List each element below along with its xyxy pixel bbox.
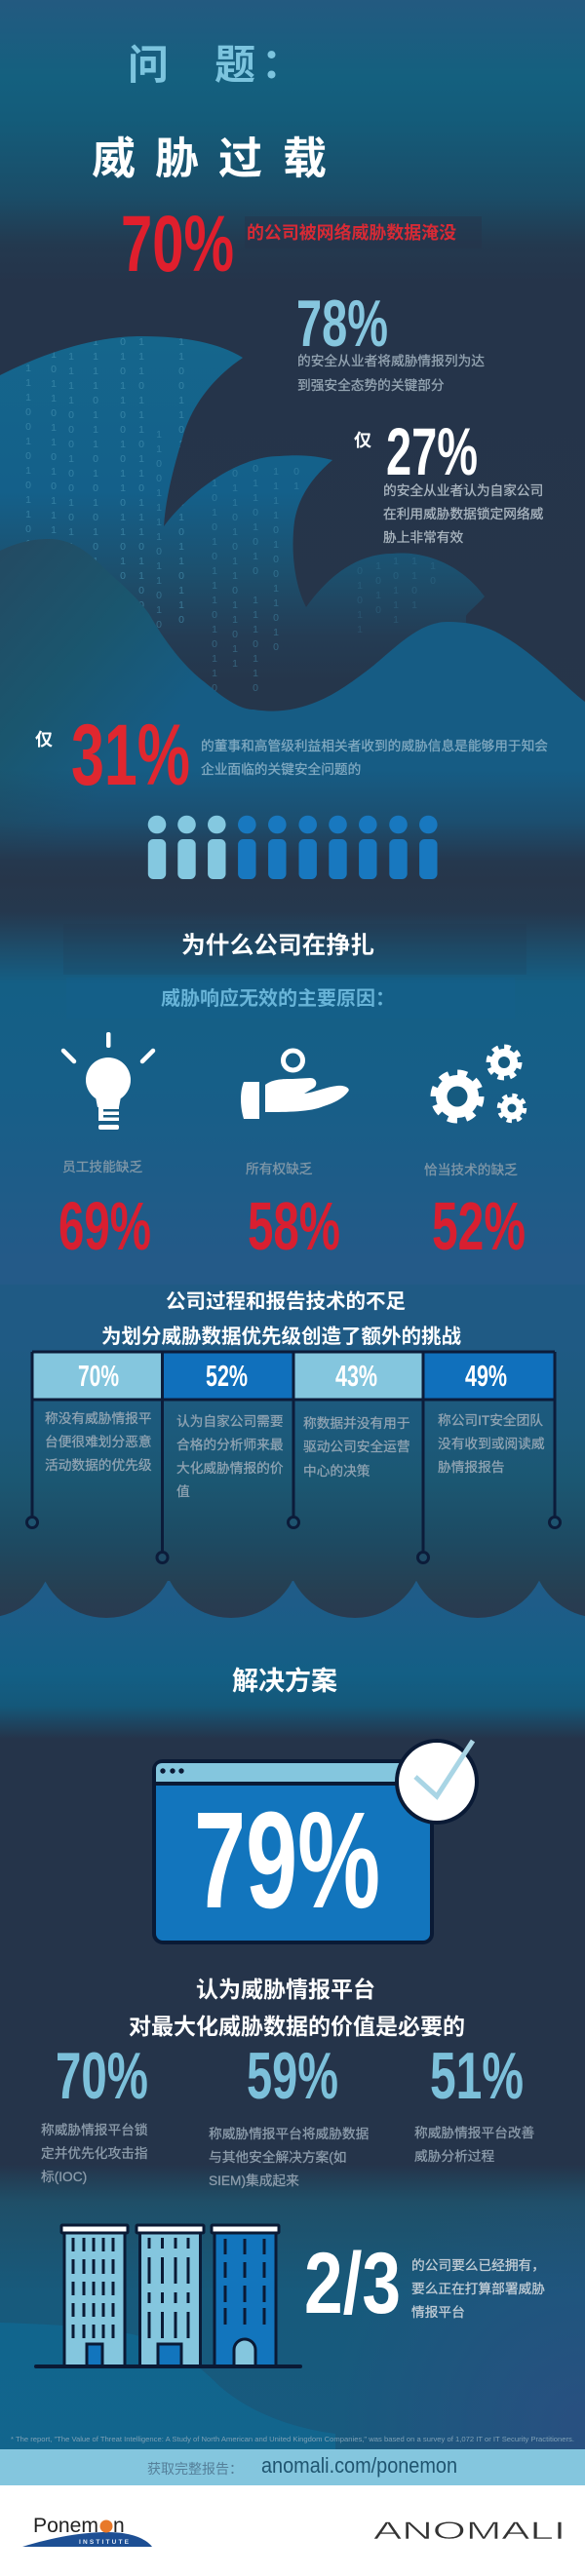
stat: 78%	[296, 287, 485, 393]
heading: process and reporting gaps: 公司过程和报告技术的不足	[166, 1290, 406, 1313]
binary data columns: 101101101011110101	[48, 349, 59, 612]
number: 27%	[386, 414, 478, 489]
description: 的安全从业者认为自家公司	[383, 482, 543, 498]
footer	[0, 2485, 585, 2576]
platform stat 2 text: 与其他安全解决方案(如	[209, 2149, 346, 2165]
platform stat 3 text	[414, 2126, 534, 2164]
scalloped section background	[0, 1285, 585, 1618]
platform stats numbers: 70%	[56, 2039, 148, 2113]
platform stat 3 text: 称威胁情报平台改善	[414, 2126, 534, 2140]
binary data columns: 101010111010110	[209, 478, 220, 697]
column 3 text	[303, 1416, 410, 1479]
subheading: main reasons	[66, 978, 515, 1019]
column 2 text: 值	[176, 1484, 190, 1499]
url: anomali.com/ponemon	[261, 2453, 457, 2478]
icon: gears	[433, 1047, 525, 1121]
description: 的公司被网络威胁数据淹没	[247, 219, 456, 245]
reason percentages: 58%	[248, 1188, 340, 1264]
number: 2/3	[304, 2234, 401, 2331]
description: 胁上非常有效	[383, 530, 463, 545]
column 2 text: 认为自家公司需要	[176, 1413, 284, 1429]
description: 在利用威胁数据锁定网络威	[383, 507, 544, 521]
logo: Ponemon Institute: n	[113, 2515, 125, 2537]
title: 问题: 题	[214, 42, 255, 88]
binary data columns: 1100111101101011	[153, 429, 165, 663]
column 1 text: 台便很难划分恶意	[45, 1434, 152, 1449]
column 2 text: 合格的分析师来最	[176, 1438, 284, 1452]
description: 到强安全态势的关键部分	[297, 377, 445, 393]
heading: 威胁过载	[92, 134, 327, 183]
reason labels	[62, 1160, 518, 1177]
number: 79%	[194, 1783, 380, 1937]
column 1 text: 称没有威胁情报平	[45, 1411, 152, 1426]
title: 问题	[128, 41, 302, 88]
heading: process and reporting gaps	[101, 1290, 461, 1348]
binary data columns: 01011	[354, 565, 366, 638]
binary data columns: 11001101001010110110	[176, 336, 187, 629]
number: 31%	[71, 706, 190, 803]
icon: hand with ownership token	[241, 1051, 349, 1119]
reason percentages: 52%	[432, 1188, 526, 1264]
column 2 text: 大化威胁情报的价	[176, 1461, 284, 1476]
column 4 text	[438, 1412, 545, 1475]
back wave	[0, 336, 485, 741]
title bar	[156, 1763, 430, 1783]
header percentages: 49%	[465, 1359, 507, 1393]
title: 问题: 问	[128, 42, 169, 88]
platform stat 1 text: 称威胁情报平台锁	[41, 2123, 148, 2137]
icon: light bulb	[63, 1032, 153, 1130]
label: 获取完整报告：	[147, 2459, 243, 2479]
wave illustration	[0, 336, 585, 883]
binary data columns: 01	[291, 466, 302, 495]
label: 仅	[35, 726, 53, 751]
description: 的董事和高管级利益相关者收到的威胁信息是能够用于知会	[201, 738, 548, 753]
binary data columns: 01101010 1110110	[250, 463, 261, 697]
column 3 text: 称数据并没有用于	[303, 1416, 410, 1431]
platform stat 1 text: 标(IOC)	[41, 2170, 87, 2184]
stat: 70% flooded	[121, 200, 482, 288]
reason labels: 员工技能缺乏	[62, 1160, 142, 1174]
column 1 text: 活动数据的优先级	[45, 1458, 152, 1473]
reason percentages: 69%	[58, 1188, 151, 1264]
frame lines	[27, 1352, 560, 1563]
column 1 text	[45, 1411, 152, 1473]
stat: 31%	[35, 706, 548, 803]
binary data columns: 111011101101110110010110	[136, 336, 147, 687]
binary data columns: 1111011101010101011	[90, 336, 101, 614]
binary data columns: 1010	[372, 560, 384, 619]
binary data columns: 10	[427, 560, 439, 590]
description	[201, 738, 548, 777]
header percentages: 70%	[78, 1359, 119, 1393]
heading: why companies struggle	[63, 924, 526, 975]
heading: threat intelligence platform	[129, 1977, 465, 2039]
description	[297, 353, 485, 393]
lower background shapes	[0, 2290, 585, 2449]
heading: threat intelligence platform: 认为威胁情报平台	[196, 1977, 375, 2002]
subheading: main reasons: 威胁响应无效的主要原因：	[161, 982, 395, 1011]
header percentages	[78, 1359, 507, 1393]
heading: 威胁过载: 载	[283, 134, 327, 183]
description: 的公司要么已经拥有，	[411, 2258, 545, 2273]
ground line	[34, 2365, 302, 2368]
heading: 威胁过载: 威	[92, 134, 136, 183]
platform stat 2 text	[209, 2127, 370, 2188]
logo: Anomali: ANOMALI	[373, 2518, 566, 2545]
header percentages: 43%	[335, 1359, 377, 1393]
building 3	[212, 2225, 279, 2366]
binary data columns: 1110010101101	[22, 363, 34, 553]
description	[411, 2258, 545, 2320]
number: 70%	[121, 200, 234, 288]
heading: 威胁过载: 胁	[155, 134, 199, 183]
description: 企业面临的关键安全问题的	[201, 761, 361, 777]
platform stats numbers: 59%	[247, 2039, 338, 2113]
browser window: 79%	[154, 1741, 477, 1942]
footnote: * The report, "The Value of Threat Intelligence: A Study of North American and United Kingdom Companies," was based on a survey of 1,072 IT or IT Security Practitioners.	[11, 2435, 574, 2443]
logo: Ponemon Institute	[22, 2515, 152, 2547]
binary data columns: 1111000100101111	[65, 351, 77, 585]
column 4 text: 胁情报报告	[438, 1460, 504, 1475]
window body	[154, 1761, 432, 1942]
platform stats numbers	[56, 2039, 524, 2113]
people pictogram: 3 of 10	[148, 816, 438, 879]
number: 78%	[296, 287, 388, 361]
column 4 text: 称公司IT安全团队	[438, 1412, 543, 1428]
platform stat 1 text: 定并优先化攻击指	[41, 2146, 148, 2161]
platform stats numbers: 51%	[430, 2039, 524, 2113]
label: 仅	[354, 427, 371, 452]
reason percentages	[58, 1188, 526, 1264]
heading: threat intelligence platform: 对最大化威胁数据的价值是必要的	[129, 2014, 465, 2039]
front wave	[0, 539, 585, 882]
heading: process and reporting gaps: 为划分威胁数据优先级创造了额外的挑战	[101, 1326, 461, 1348]
description: 情报平台	[411, 2305, 465, 2320]
stat: 27%	[354, 414, 544, 545]
table: four challenges	[27, 1351, 560, 1563]
column 2 text	[176, 1413, 284, 1499]
header percentages: 52%	[206, 1359, 248, 1393]
description: 的安全从业者将威胁情报列为达	[297, 353, 485, 368]
heading: 威胁过载: 过	[218, 134, 262, 183]
reason labels: 恰当技术的缺乏	[424, 1163, 518, 1177]
icon: buildings	[34, 2225, 302, 2368]
binary data columns: 1111010011010	[270, 466, 282, 656]
heading: solution: 解决方案	[232, 1660, 337, 1698]
check badge	[397, 1741, 477, 1823]
binary data columns: 10111	[390, 556, 402, 629]
building 1	[61, 2225, 128, 2366]
column 3 text: 驱动公司安全运营	[303, 1439, 410, 1454]
platform stat 2 text: 称威胁情报平台将威胁数据	[209, 2127, 370, 2141]
title: 问题: ：	[261, 41, 302, 87]
stat: two thirds	[304, 2234, 545, 2331]
call to action band	[0, 2449, 585, 2485]
fade into page background	[0, 770, 585, 883]
column 4 text: 没有收到或阅读威	[438, 1437, 545, 1451]
binary data columns: 1101	[409, 556, 420, 614]
logo: Ponemon Institute: Ponem	[33, 2515, 98, 2537]
platform stat 2 text: SIEM)集成起来	[209, 2173, 299, 2188]
platform stat 1 text	[41, 2123, 148, 2184]
header cells	[32, 1351, 555, 1400]
column 3 text: 中心的决策	[303, 1463, 370, 1479]
binary data columns	[22, 336, 439, 697]
platform stat 3 text: 威胁分析过程	[414, 2149, 494, 2164]
binary data columns: 01101011011011	[229, 468, 241, 673]
building 2	[136, 2225, 204, 2366]
description: 要么正在打算部署威胁	[411, 2281, 545, 2296]
heading: why companies struggle: 为什么公司在挣扎	[181, 926, 374, 961]
binary data columns: 01011001011011010110100	[117, 336, 129, 673]
logo: Ponemon Institute: INSTITUTE	[79, 2539, 130, 2546]
reason labels: 所有权缺乏	[246, 1161, 313, 1176]
description	[383, 482, 544, 545]
